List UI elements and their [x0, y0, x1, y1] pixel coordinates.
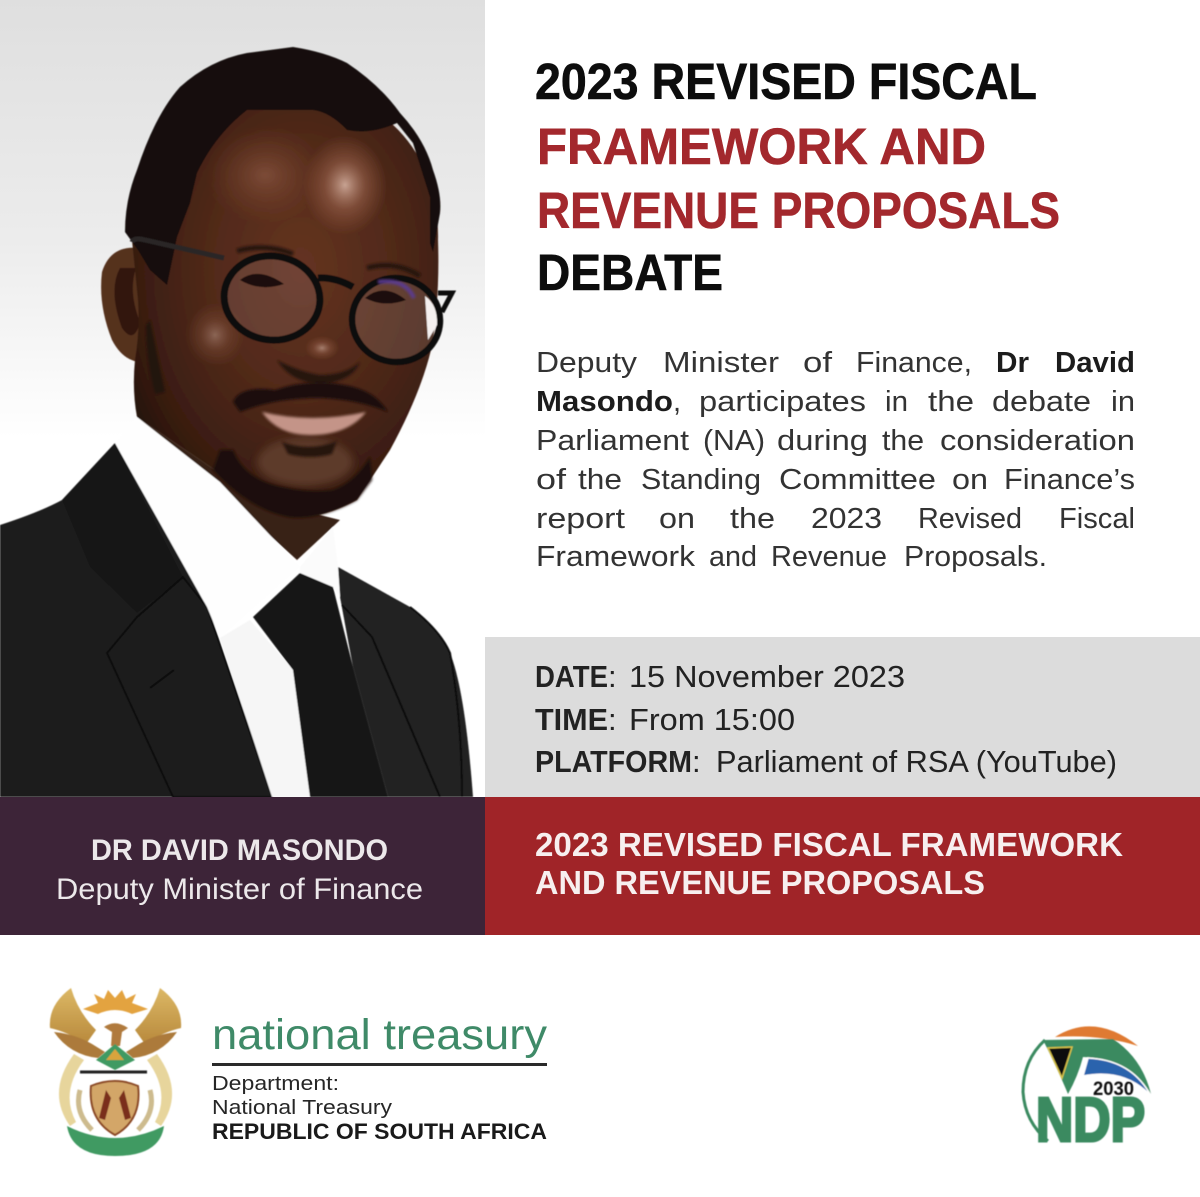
body paragraph: the [578, 464, 622, 496]
body paragraph: Dr [996, 347, 1029, 379]
ear [101, 248, 150, 362]
soul patch [282, 441, 337, 457]
body paragraph: consideration [940, 425, 1135, 457]
cheek glow [192, 306, 244, 361]
time row [535, 702, 795, 737]
topic line 2: AND REVENUE PROPOSALS [535, 864, 985, 901]
forehead glow [218, 137, 308, 212]
glasses [132, 239, 452, 368]
details background [485, 637, 1200, 797]
left jacket [0, 443, 272, 797]
logo: NDP 2030 [1023, 1026, 1151, 1155]
band background [485, 797, 1200, 935]
body paragraph: in [1111, 386, 1135, 418]
body paragraph: the [928, 386, 974, 418]
body paragraph: (NA) [703, 425, 765, 457]
body paragraph: on [659, 503, 695, 535]
body paragraph: Minister [663, 347, 779, 379]
beard [213, 450, 372, 517]
year 2030: 2030 [1093, 1079, 1134, 1100]
right eye [365, 290, 406, 304]
chin tone [257, 438, 353, 486]
orange arc [1055, 1026, 1138, 1046]
right lens [347, 272, 445, 368]
right eye reflection [378, 281, 414, 298]
face [132, 88, 438, 517]
eyebrows [237, 248, 420, 276]
face tones [185, 125, 387, 486]
icon: South African coat of arms [50, 988, 181, 1156]
body paragraph: Framework [536, 541, 696, 573]
date row: 15 November 2023 [629, 659, 905, 694]
topic line 1: 2023 REVISED FISCAL FRAMEWORK [535, 826, 1123, 863]
right wing lower [126, 1032, 177, 1058]
date row: : [608, 659, 617, 694]
left lens [219, 250, 325, 346]
department name: National Treasury [212, 1097, 392, 1119]
body paragraph: 2023 [811, 503, 882, 535]
right wing upper [135, 988, 181, 1044]
spear and knobkerrie [80, 1070, 147, 1074]
lapel buttonhole [150, 670, 174, 688]
body paragraph: the [730, 503, 775, 535]
body paragraph: Deputy [536, 347, 638, 379]
diamond centre [106, 1049, 124, 1060]
body paragraph: Finance’s [1004, 464, 1135, 496]
temple right [438, 293, 452, 312]
platform row [535, 744, 1117, 779]
heading line 2: FRAMEWORK AND [537, 118, 986, 175]
body paragraph: and [709, 541, 757, 573]
body paragraph: Parliament [536, 425, 689, 457]
body paragraph: of [536, 464, 567, 496]
body paragraph: , [673, 386, 681, 418]
logo: national treasury [212, 1011, 548, 1144]
body paragraph: David [1055, 347, 1135, 379]
panel: portrait background [0, 0, 485, 797]
body paragraph: Revenue [771, 541, 887, 573]
body paragraph: on [952, 464, 988, 496]
speaker name: DR DAVID MASONDO [91, 834, 388, 867]
platform row: : [692, 744, 701, 779]
right lapel line [342, 605, 462, 797]
panel: topic band [485, 797, 1200, 935]
platform row: Parliament of RSA (YouTube) [716, 744, 1117, 779]
moustache [233, 382, 388, 412]
bridge [318, 278, 353, 287]
left wing lower [54, 1032, 105, 1058]
left lapel [62, 443, 183, 613]
shirt body [220, 620, 310, 797]
body paragraph: debate [992, 386, 1091, 418]
blue band [1083, 1058, 1151, 1096]
left wing upper [50, 988, 96, 1044]
heading line 1: 2023 REVISED FISCAL [535, 53, 1037, 110]
body paragraph: Proposals. [904, 541, 1047, 573]
body paragraph: Fiscal [1059, 503, 1135, 535]
logo rule [212, 1063, 547, 1066]
sun [83, 990, 148, 1014]
lower lapel [107, 577, 272, 797]
band background [0, 797, 485, 935]
neck [137, 417, 340, 560]
shield figures [99, 1090, 131, 1120]
body paragraph: of [803, 347, 833, 379]
body paragraph: the [882, 425, 924, 457]
shield [91, 1081, 139, 1135]
body paragraph: participates [699, 386, 866, 418]
nose [277, 360, 360, 384]
lips [262, 412, 366, 435]
nose highlight [305, 336, 339, 360]
portrait: Dr David Masondo [0, 47, 473, 797]
side stubble [146, 320, 165, 394]
body paragraph: Masondo [536, 386, 673, 418]
body paragraph: during [777, 425, 868, 457]
necktie [253, 573, 388, 797]
date row: DATE [535, 659, 608, 694]
right collar [300, 527, 340, 597]
time row: : [608, 702, 617, 737]
tusks [59, 1054, 172, 1126]
time row: TIME [535, 702, 608, 737]
department label: Department: [212, 1073, 339, 1095]
panel: event details [485, 637, 1200, 797]
left eye [240, 274, 284, 287]
body paragraph: report [536, 503, 625, 535]
lens highlight [425, 296, 437, 340]
left collar [115, 417, 300, 638]
body paragraph: Standing [641, 464, 761, 496]
green ring [1023, 1040, 1048, 1141]
hair [125, 47, 440, 285]
NDP letters: NDP [1036, 1086, 1145, 1155]
time row: From 15:00 [629, 702, 795, 737]
black triangle [1048, 1047, 1072, 1078]
forehead highlight [308, 140, 383, 230]
body paragraph [536, 347, 1135, 573]
body paragraph: Committee [779, 464, 936, 496]
motto ribbon [67, 1126, 164, 1156]
body paragraph: Finance, [856, 347, 972, 379]
right jacket [338, 567, 473, 797]
speaker role: Deputy Minister of Finance [56, 873, 423, 906]
platform row: PLATFORM [535, 744, 692, 779]
inner ear [114, 268, 140, 335]
panel: speaker name band [0, 797, 485, 935]
heading line 4: DEBATE [537, 244, 723, 301]
secretary bird [104, 1023, 128, 1046]
republic name: REPUBLIC OF SOUTH AFRICA [212, 1119, 547, 1144]
protea diamond [96, 1044, 135, 1070]
wheat [78, 1090, 152, 1130]
heading line 3: REVENUE PROPOSALS [537, 182, 1060, 239]
temple left [132, 239, 224, 258]
logo wordmark: national treasury [212, 1011, 548, 1059]
green flag shape [1043, 1039, 1151, 1094]
body paragraph: Revised [918, 503, 1022, 535]
heading [535, 53, 1060, 301]
body paragraph: in [885, 386, 908, 418]
